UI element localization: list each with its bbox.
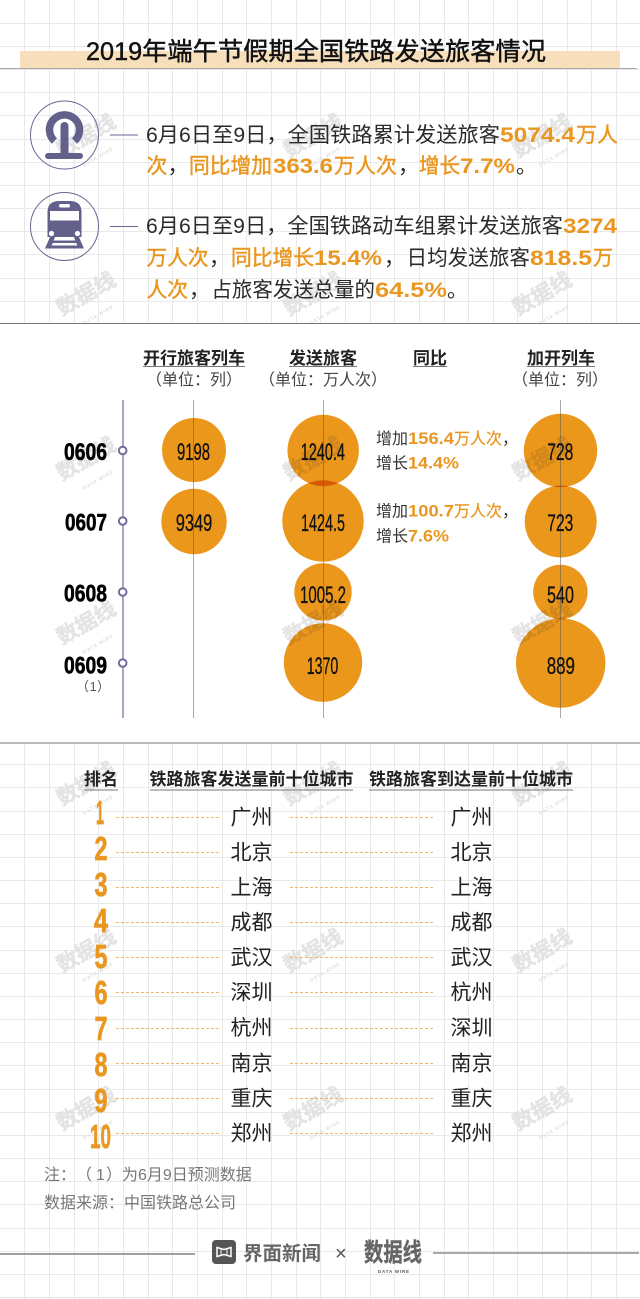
bubble values: 1240.4 (301, 439, 345, 466)
text: passenger total: 6月6日至9日，全国铁路累计发送旅客 (146, 124, 500, 147)
text: 数据线 (280, 268, 347, 320)
text: 数据线 (53, 597, 120, 649)
arrival cities: 武汉 (450, 946, 492, 970)
text: DATA WIRE (309, 794, 342, 817)
text: 数据线 (53, 433, 120, 485)
table headers: 铁路旅客发送量前十位城市 (150, 769, 354, 789)
text: EMU passengers: 6月6日至9日，全国铁路动车组累计发送旅客 (146, 215, 563, 238)
Data Wire logo: DATA WIRE (378, 1269, 410, 1274)
year-on-year notes: 增加 (376, 430, 408, 448)
arrival cities: 成都 (450, 912, 492, 934)
column headers: 开行旅客列车 (143, 348, 245, 368)
text: passenger total: 增长 (419, 155, 460, 178)
text: passenger total: 。 (516, 155, 537, 178)
text: 数据线 (53, 1083, 120, 1135)
departure cities: 郑州 (230, 1122, 272, 1146)
arrival cities: 广州 (450, 806, 492, 830)
rank numbers: 10 (90, 1118, 111, 1155)
bubble values: 728 (547, 439, 573, 466)
text: DATA WIRE (82, 304, 115, 327)
departure cities: 北京 (230, 842, 272, 864)
text: DATA WIRE (538, 304, 571, 327)
rank numbers: 9 (94, 1082, 108, 1119)
bubbles: passengers sent (282, 415, 364, 702)
text: EMU passengers: 64.5% (375, 279, 447, 302)
rank numbers: 7 (94, 1010, 108, 1047)
text: DATA WIRE (82, 146, 115, 169)
text: DATA WIRE (538, 1119, 571, 1142)
text: passenger total: 363.6 (273, 155, 333, 178)
arrival cities: 北京 (450, 842, 492, 864)
text: EMU passengers: 万 (593, 247, 613, 270)
date labels: 0608 (64, 580, 107, 608)
text: EMU passengers: 日均发送旅客 (406, 247, 530, 270)
text: EMU passengers: ， (189, 279, 210, 302)
year-on-year notes: 万人次 (454, 502, 502, 520)
panel: daily bubble chart (64, 348, 608, 718)
year-on-year notes: 增长 (376, 528, 408, 546)
text: EMU passengers: ， (384, 247, 405, 270)
bubble values (176, 439, 575, 680)
text: DATA WIRE (309, 146, 342, 169)
text: passenger total: 万人 (576, 124, 618, 147)
table headers (84, 769, 573, 790)
bubble values: 723 (547, 510, 573, 537)
text: DATA WIRE (538, 961, 571, 984)
text: EMU passengers: 15.4% (314, 247, 382, 270)
connector line (110, 226, 138, 228)
year-on-year notes: 万人次 (454, 430, 502, 448)
text: DATA WIRE (538, 794, 571, 817)
arrival cities: 上海 (450, 876, 492, 900)
rank numbers: 1 (96, 794, 104, 831)
icon: high-speed train (30, 192, 98, 260)
column headers: （单位：万人次） (259, 371, 387, 389)
departure cities: 武汉 (230, 946, 272, 970)
departure cities: 南京 (230, 1052, 272, 1076)
year-on-year notes: 增长 (376, 454, 408, 472)
text: 数据线 (509, 758, 576, 810)
timeline (119, 400, 126, 718)
Jiemian wordmark: 界面新闻 (243, 1243, 321, 1265)
text: DATA WIRE (82, 633, 115, 656)
year-on-year notes: 7.6% (408, 528, 449, 546)
year-on-year notes: ， (502, 431, 518, 448)
title (0, 38, 637, 68)
footnotes (44, 1166, 252, 1212)
text: 数据线 (509, 597, 576, 649)
bubble values: 9349 (176, 510, 212, 537)
text: DATA WIRE (309, 304, 342, 327)
arrival cities: 南京 (450, 1052, 492, 1076)
text: passenger total (146, 124, 618, 178)
departure cities: 深圳 (230, 982, 272, 1004)
text: EMU passengers: 人次 (146, 279, 188, 302)
column headers: 发送旅客 (289, 348, 357, 368)
text: 数据线 (280, 1083, 347, 1135)
bubble values: 1424.5 (301, 510, 345, 537)
footnotes: 注：（1）为6月9日预测数据 (44, 1166, 252, 1184)
text: 数据线 (509, 925, 576, 977)
arrival cities: 重庆 (450, 1088, 492, 1110)
departure cities: 重庆 (230, 1088, 272, 1110)
text: 数据线 (509, 110, 576, 162)
year-on-year notes: 156.4 (408, 430, 455, 448)
column headers: （单位：列） (512, 371, 608, 389)
departure cities (230, 806, 272, 1146)
departure cities: 杭州 (230, 1017, 272, 1040)
rank numbers: 6 (94, 974, 108, 1011)
arrival cities: 深圳 (450, 1017, 492, 1040)
rank numbers: 3 (94, 866, 108, 903)
text: passenger total: 次 (146, 155, 167, 178)
text: DATA WIRE (309, 961, 342, 984)
bubble values: 889 (547, 653, 575, 680)
arrival cities: 郑州 (450, 1122, 492, 1146)
text: EMU passengers: ， (209, 247, 230, 270)
year-on-year notes: 100.7 (408, 502, 454, 520)
text: 数据线 (53, 110, 120, 162)
text: passenger total: 同比增加 (189, 155, 272, 178)
text: 数据线 (509, 268, 576, 320)
Data Wire logo: 数据线 (364, 1239, 422, 1267)
rank numbers: 8 (94, 1046, 108, 1083)
bubble values: 9198 (177, 439, 210, 466)
date labels: 0607 (65, 510, 107, 536)
text: DATA WIRE (82, 961, 115, 984)
text: passenger total: ， (398, 155, 419, 178)
text: 数据线 (53, 925, 120, 977)
text: 数据线 (280, 758, 347, 810)
year-on-year notes: 增加 (376, 502, 408, 520)
text: EMU passengers: 3274 (563, 215, 617, 238)
bubble values: 1005.2 (300, 582, 346, 609)
text: DATA WIRE (82, 794, 115, 817)
text: 数据线 (53, 758, 120, 810)
column headers (143, 348, 608, 389)
bubbles: passenger trains (161, 418, 227, 554)
footer (0, 1239, 639, 1274)
text: passenger total: 万人次 (334, 155, 397, 178)
text: DATA WIRE (309, 1119, 342, 1142)
date labels (64, 439, 110, 694)
icon: railway logo (30, 101, 98, 169)
bubbles: extra trains (516, 414, 605, 708)
footnotes: 数据来源：中国铁路总公司 (44, 1194, 236, 1212)
text: 数据线 (280, 110, 347, 162)
text: passenger total: 7.7% (460, 155, 515, 178)
bubble values: 540 (547, 582, 574, 609)
year-on-year notes: 14.4% (408, 454, 459, 472)
text: EMU passengers: 同比增长 (231, 247, 314, 270)
text: EMU passengers: 万人次 (146, 247, 208, 270)
panel: top ten cities (84, 769, 573, 1155)
date labels: （1） (76, 679, 110, 694)
text: passenger total: 5074.4 (500, 124, 575, 147)
text: EMU passengers: 。 (447, 279, 468, 302)
table headers: 排名 (84, 770, 118, 789)
departure cities: 广州 (230, 806, 272, 830)
table headers: 铁路旅客到达量前十位城市 (369, 769, 573, 789)
rank numbers: 4 (94, 902, 108, 939)
text: DATA WIRE (538, 146, 571, 169)
text: 数据线 (53, 268, 120, 320)
rank numbers: 2 (94, 830, 108, 867)
text: EMU passengers: 818.5 (530, 247, 592, 270)
times sign: × (335, 1243, 347, 1265)
departure cities: 成都 (230, 912, 272, 934)
rank numbers (90, 794, 111, 1155)
text: 数据线 (509, 433, 576, 485)
column headers: 加开列车 (527, 348, 595, 368)
arrival cities: 杭州 (450, 982, 492, 1004)
rank numbers: 5 (94, 938, 108, 975)
title: 2019年端午节假期全国铁路发送旅客情况 (86, 38, 546, 66)
text: DATA WIRE (82, 469, 115, 492)
panel: summary (30, 101, 618, 302)
date labels: 0606 (64, 439, 107, 466)
connector line (110, 134, 138, 136)
text: EMU passengers: 占旅客发送总量的 (212, 279, 375, 302)
column headers: （单位：列） (146, 371, 242, 389)
date labels: 0609 (64, 652, 107, 680)
column headers: 同比 (413, 349, 447, 368)
year-on-year notes: ， (502, 504, 518, 520)
icon: Jiemian logo (212, 1240, 236, 1264)
text: 数据线 (509, 1083, 576, 1135)
text: EMU passengers (146, 215, 617, 302)
Data Wire logo (364, 1239, 422, 1274)
departure cities: 上海 (230, 876, 272, 900)
text: passenger total: ， (168, 155, 188, 178)
text: 数据线 (280, 925, 347, 977)
arrival cities (450, 806, 492, 1146)
text: 数据线 (280, 597, 347, 649)
text: 数据线 (280, 433, 347, 485)
text: DATA WIRE (82, 1119, 115, 1142)
bubble values: 1370 (307, 653, 338, 680)
year-on-year notes (376, 430, 518, 546)
